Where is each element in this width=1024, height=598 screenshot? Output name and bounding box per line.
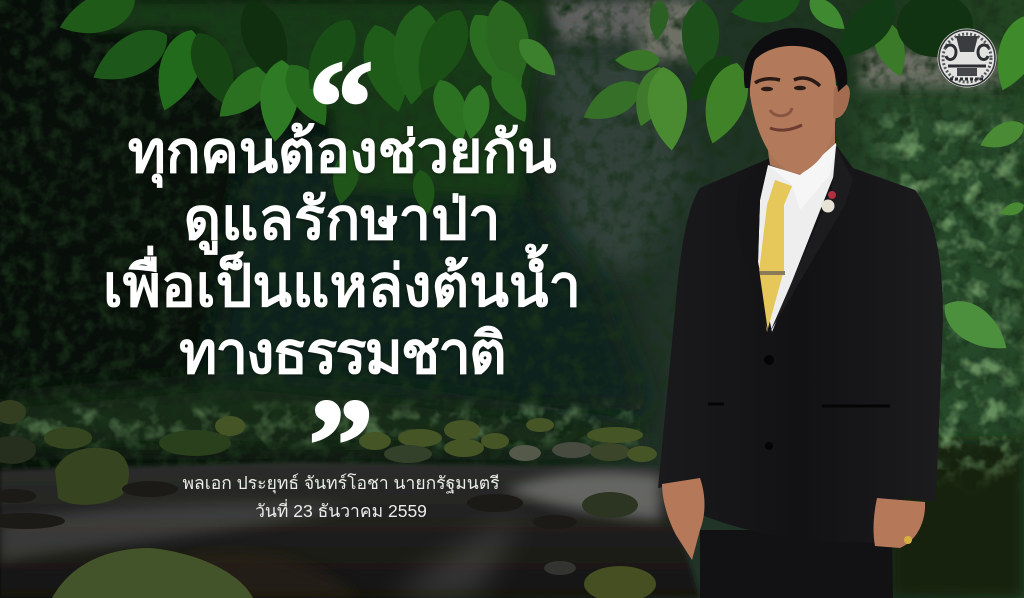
pins: [828, 191, 836, 199]
river: [0, 462, 700, 598]
foreground leaves: top-left canopy: [54, 0, 648, 216]
government seal: [938, 28, 996, 88]
quote headline: [103, 120, 581, 386]
mid forest: [200, 130, 650, 410]
facial features: [755, 78, 820, 86]
portrait of the speaker: [658, 28, 943, 598]
closing quotation mark: ”: [308, 373, 374, 517]
collar: [768, 143, 836, 210]
ear: [833, 83, 850, 118]
jacket: [658, 145, 943, 543]
hair: [744, 28, 847, 92]
quote headline: เพื่อเป็นแหล่งต้นน้ำ: [103, 254, 581, 319]
neck: [765, 120, 835, 176]
rocks: [0, 400, 657, 598]
foliage texture: [0, 0, 1024, 470]
legs: [700, 530, 893, 598]
tie: [758, 180, 792, 332]
attribution: วันที่ 23 ธันวาคม 2559: [255, 501, 427, 521]
face: [750, 42, 837, 174]
misty sky gap: [545, 0, 650, 45]
shirt: [758, 143, 838, 332]
right side foliage mass: [850, 95, 1024, 450]
attribution: [182, 473, 500, 521]
jacket buttons and pockets: [764, 355, 774, 365]
attribution: พลเอก ประยุทธ์ จันทร์โอชา นายกรัฐมนตรี: [182, 473, 500, 493]
quote headline: ทุกคนต้องช่วยกัน: [128, 120, 556, 185]
sky on the right: [640, 0, 1000, 90]
quote headline: ดูแลรักษาป่า: [183, 187, 501, 252]
opening quotation mark: “: [308, 35, 374, 179]
hands: [662, 478, 704, 560]
quote headline: ทางธรรมชาติ: [179, 321, 505, 386]
foreground leaves: top-right: [615, 0, 1024, 362]
canopy backing top-left: [80, 0, 545, 200]
lapels: [736, 162, 768, 332]
